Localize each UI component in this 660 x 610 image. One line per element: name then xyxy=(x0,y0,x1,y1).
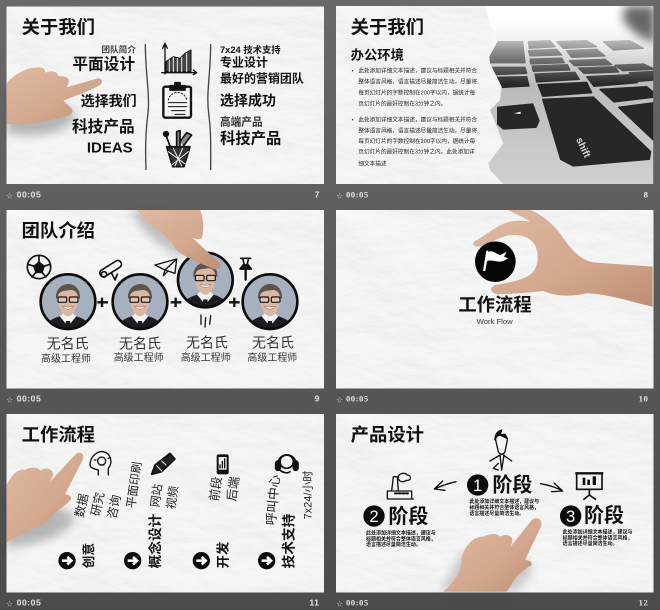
step 3 details: 后端 xyxy=(225,476,242,502)
curved dividers xyxy=(145,44,211,170)
panel: slide 10 work flow xyxy=(336,210,653,404)
stage 3 text: 此处添加详细文本描述，建议与 xyxy=(563,528,632,535)
step 1 details xyxy=(72,491,124,520)
motion lines xyxy=(201,315,211,327)
keyboard photo: shift xyxy=(573,136,592,160)
footer: 00:05 xyxy=(17,394,41,404)
names: 无名氏 xyxy=(47,335,89,351)
step 4 details: 7x24/小时 xyxy=(302,471,315,519)
torn paper sheet xyxy=(336,6,516,184)
stage 2 text xyxy=(366,529,436,548)
step 4 details: 呼叫中心 xyxy=(264,474,283,526)
hand holding icon xyxy=(473,210,653,307)
footer: 00:05 xyxy=(346,598,369,608)
arrow icons xyxy=(58,552,275,569)
hand pointing xyxy=(7,67,102,124)
step 1 details: 数据 xyxy=(72,492,91,519)
step headings: 开发 xyxy=(214,541,230,568)
panel: slide 8 office xyxy=(336,6,655,201)
footer: 10 xyxy=(639,394,648,404)
icon: push pin xyxy=(240,258,251,280)
title: 产品设计 xyxy=(351,424,424,445)
stage 3: 3 xyxy=(566,507,575,526)
portrait 2 xyxy=(113,274,167,329)
names: 无名氏 xyxy=(119,335,161,351)
bullet list 1: 整体语言风格，语言描述尽量简洁生动。尽量将 xyxy=(358,77,477,85)
hand pointing up xyxy=(7,453,83,542)
right text column xyxy=(220,44,304,147)
footer xyxy=(336,190,649,201)
footer xyxy=(6,190,320,201)
hand pointing down xyxy=(137,210,220,269)
roles: 高级工程师 xyxy=(181,351,231,364)
footer: ☆ xyxy=(336,599,343,608)
stage 1 text: 语言描述尽量简洁生动。 xyxy=(469,510,524,517)
roles: 高级工程师 xyxy=(114,351,164,364)
step 2 details: 网站 xyxy=(148,483,165,508)
step 2 details xyxy=(125,461,181,510)
icon: diploma xyxy=(99,259,123,280)
stage 3 text xyxy=(563,528,632,547)
stage 2 text: 标题相关并符合整体语言风格， xyxy=(366,535,436,542)
step 3 details: 前段 xyxy=(206,476,225,502)
step 2 details: 平面印刷 xyxy=(125,461,144,509)
footer: 00:05 xyxy=(17,598,41,608)
roles xyxy=(41,351,297,365)
footer xyxy=(336,598,648,608)
hand shadow xyxy=(7,93,77,136)
portrait 4 xyxy=(243,274,297,329)
icon: factory xyxy=(387,473,413,499)
stage 1 xyxy=(467,472,532,496)
step 1 details: 咨询 xyxy=(104,493,124,520)
right text column: 科技产品 xyxy=(220,129,281,147)
portrait 3 xyxy=(178,253,233,307)
icon: headset xyxy=(276,455,298,473)
title: 工作流程 xyxy=(458,294,532,315)
hand pointing up xyxy=(443,518,541,592)
icon: man xyxy=(490,430,512,470)
bullet list 2: • xyxy=(352,118,354,124)
left text column: IDEAS xyxy=(87,140,133,157)
names xyxy=(47,334,294,351)
stage 1 text xyxy=(469,498,539,517)
icon: pencil basket xyxy=(164,131,192,167)
arrow to stage 3 xyxy=(541,483,563,492)
stage 3 text: 标题相关并符合整体语言风格， xyxy=(563,534,632,541)
icon: line chart xyxy=(162,43,197,75)
keyboard photo xyxy=(485,6,654,184)
bullet list 1 xyxy=(352,66,477,107)
stage 1 text: 标题相关并符合整体语言风格， xyxy=(469,504,539,511)
bullet list 2: 每页幻灯片的字数控制在200字以内，据统计每 xyxy=(358,137,476,145)
left text column: 选择我们 xyxy=(81,93,137,109)
icon: head with bulb xyxy=(90,452,111,475)
footer: 00:05 xyxy=(17,190,41,200)
stage 1: 1 xyxy=(473,476,482,495)
step headings: 概念设计 xyxy=(147,513,163,568)
panel: slide 9 team xyxy=(6,210,324,404)
footer: 8 xyxy=(644,190,649,200)
step headings: 创意 xyxy=(81,543,96,568)
footer xyxy=(336,394,648,404)
icon: football xyxy=(27,255,51,279)
bullet list 2: 整体语言风格，语言描述尽量简洁生动。尽量将 xyxy=(358,126,477,134)
stage 2 text: 语言描述尽量简洁生动。 xyxy=(366,541,421,548)
hand shadow xyxy=(440,545,533,592)
footer xyxy=(6,394,320,404)
bullet list 2: 页幻灯片的最好控制在3分钟之内。此处添加详 xyxy=(358,148,475,156)
title: 关于我们 xyxy=(351,16,424,37)
footer: ☆ xyxy=(336,192,343,201)
footer: 9 xyxy=(315,394,320,404)
right text column: 7x24 技术支持 xyxy=(220,44,281,55)
footer xyxy=(6,598,319,608)
footer: 00:05 xyxy=(346,394,369,404)
step 1 details: 研究 xyxy=(88,491,107,517)
bullet list 1: 每页幻灯片的字数控制在200字以内，据统计每 xyxy=(358,89,476,97)
bullet list 2 xyxy=(352,116,477,167)
roles: 高级工程师 xyxy=(41,352,91,365)
step headings xyxy=(81,513,297,568)
bullet list 1: 页幻灯片的最好控制在3分钟之内。 xyxy=(358,99,446,107)
arrow to stage 2 xyxy=(434,481,456,490)
bullet list 2: 此处添加详细文本描述，建议与标题相关并符合 xyxy=(358,116,477,124)
title: 工作流程 xyxy=(22,424,95,445)
icon: pencil xyxy=(152,453,175,474)
title: 关于我们 xyxy=(22,16,95,37)
icon: paper plane xyxy=(155,259,177,276)
right text column: 专业设计 xyxy=(220,55,268,70)
bullet list 1: • xyxy=(352,68,354,74)
stage 1 text: 此处添加详细文本描述，建议与 xyxy=(469,498,539,505)
stage 1: 阶段 xyxy=(492,472,532,496)
title: 团队介绍 xyxy=(22,220,95,241)
plus signs xyxy=(97,298,240,307)
names: 无名氏 xyxy=(252,334,294,350)
step 3 details xyxy=(206,476,242,502)
subtitle: 办公环境 xyxy=(351,46,404,62)
right text column: 高端产品 xyxy=(220,115,263,128)
stage 2 text: 此处添加详细文本描述，建议与 xyxy=(366,529,436,536)
footer: ☆ xyxy=(336,395,343,404)
icon: clipboard xyxy=(163,83,191,118)
panel: slide 11 process xyxy=(6,414,324,608)
stage 3: 阶段 xyxy=(584,503,624,527)
panel: slide 12 product design xyxy=(336,414,653,608)
roles: 高级工程师 xyxy=(247,351,297,364)
icon: phone xyxy=(217,454,229,474)
footer: 12 xyxy=(639,598,648,608)
footer: 11 xyxy=(309,598,319,608)
left text column xyxy=(72,44,137,157)
footer: 00:05 xyxy=(346,190,369,200)
bullet list 1: 此处添加详细文本描述，建议与标题相关并符合 xyxy=(358,66,477,74)
step 2 details: 视频 xyxy=(164,485,181,510)
step headings: 技术支持 xyxy=(281,513,297,568)
bullet list 2: 细文本描述 xyxy=(358,159,387,167)
hand shadow xyxy=(130,210,187,258)
stage 2: 2 xyxy=(369,507,379,526)
footer: ☆ xyxy=(6,395,13,404)
panel: slide 7 about us xyxy=(6,7,324,201)
stage 2 xyxy=(363,504,428,528)
stage 2: 阶段 xyxy=(388,504,428,528)
left text column: 团队简介 xyxy=(101,44,136,55)
portrait 1 xyxy=(41,274,95,329)
subtitle: Work Flow xyxy=(477,317,513,326)
stage 3 text: 语言描述尽量简洁生动。 xyxy=(563,540,617,547)
left text column: 科技产品 xyxy=(72,117,135,136)
left text column: 平面设计 xyxy=(72,55,135,73)
footer: ☆ xyxy=(6,599,13,608)
hand shadow xyxy=(7,505,77,548)
stage 3 xyxy=(560,503,624,527)
names: 无名氏 xyxy=(186,334,228,350)
right text column: 最好的营销团队 xyxy=(220,71,304,86)
footer: 7 xyxy=(315,190,320,200)
icon: presentation board xyxy=(575,473,603,500)
step 4 details xyxy=(264,471,315,526)
icon: flag in circle xyxy=(475,241,516,282)
footer: ☆ xyxy=(6,192,13,201)
right text column: 选择成功 xyxy=(220,92,276,108)
